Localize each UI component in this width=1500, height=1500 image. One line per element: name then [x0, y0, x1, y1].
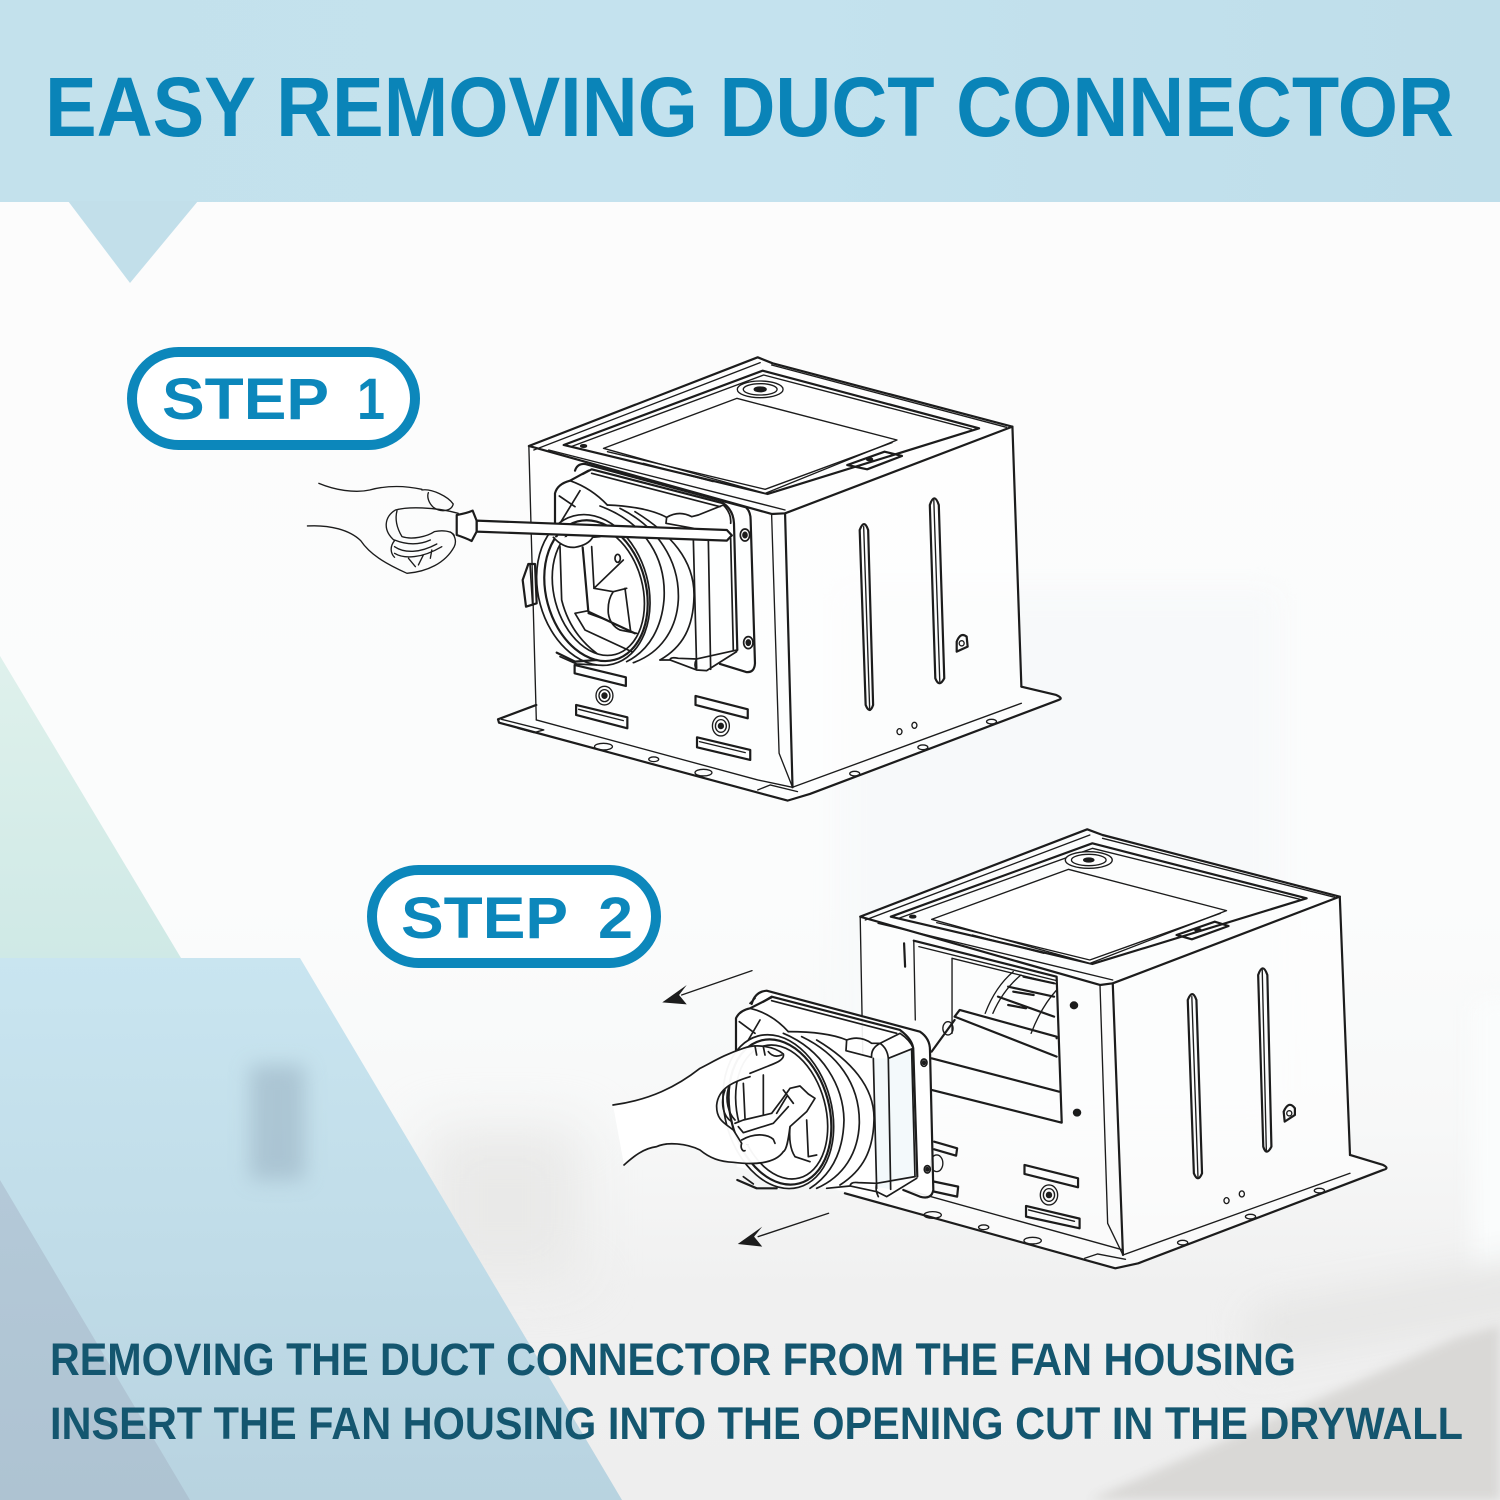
arrow: lower pull direction: [738, 1213, 829, 1247]
step 1 badge: STEP: [162, 367, 329, 432]
step 2 badge: STEP: [401, 886, 568, 951]
duct connector, step 1: [520, 464, 755, 678]
hand gripping connector: [613, 1046, 815, 1165]
description text: REMOVING THE DUCT CONNECTOR FROM THE FAN HOUSING: [50, 1334, 1296, 1385]
housing, step 1: [498, 357, 1061, 801]
illustration: fan housing with connector pulled out, step 2: [613, 829, 1386, 1268]
step 1 badge: 1: [357, 367, 385, 432]
removed duct connector and hand, step 2: [613, 991, 933, 1201]
step 2 badge: [372, 870, 656, 963]
step 2 badge: 2: [598, 886, 633, 951]
arrow: upper pull direction: [662, 971, 752, 1004]
housing, step 2: [845, 829, 1386, 1268]
screwdriver and hand, step 1: [307, 483, 732, 573]
blurred dark vase shape: [250, 1065, 305, 1180]
illustration: fan housing with screwdriver, step 1: [307, 357, 1061, 801]
description text: [50, 1334, 1463, 1449]
step 1 badge: [132, 352, 415, 445]
